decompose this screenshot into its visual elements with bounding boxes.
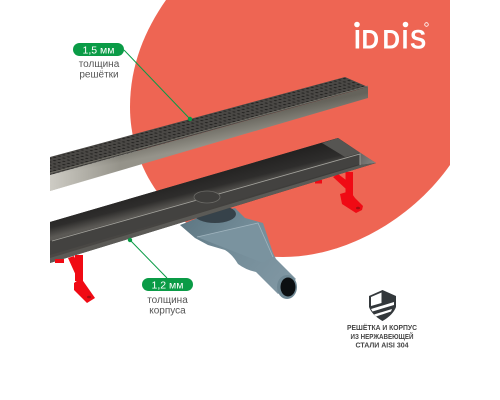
text: material note: ИЗ НЕРЖАВЕЮЩЕЙ [350, 332, 414, 341]
text: material note: СТАЛИ AISI 304 [356, 340, 409, 350]
callout: grate thickness [73, 43, 192, 121]
callout: grate thickness: толщина [79, 59, 120, 70]
drain opening [194, 191, 220, 203]
callout: grate thickness: решётки [79, 70, 119, 80]
callout: body thickness: корпуса [149, 306, 186, 316]
channel body [50, 138, 376, 263]
icon: shield [369, 290, 396, 321]
callout: grate thickness: 1,5 мм [83, 44, 114, 56]
red circle background [130, 0, 450, 257]
siphon drain [180, 205, 297, 299]
callout: body thickness: толщина [147, 295, 188, 306]
callout: body thickness [128, 238, 193, 316]
logo: IDDIS: IDDIS [354, 25, 426, 55]
red leg: right [315, 172, 363, 213]
red leg: left [55, 255, 95, 303]
text: material note: РЕШЁТКА И КОРПУС [347, 323, 417, 332]
grate [50, 77, 368, 191]
text: material note [347, 323, 417, 350]
callout: body thickness: 1,2 мм [152, 280, 183, 292]
